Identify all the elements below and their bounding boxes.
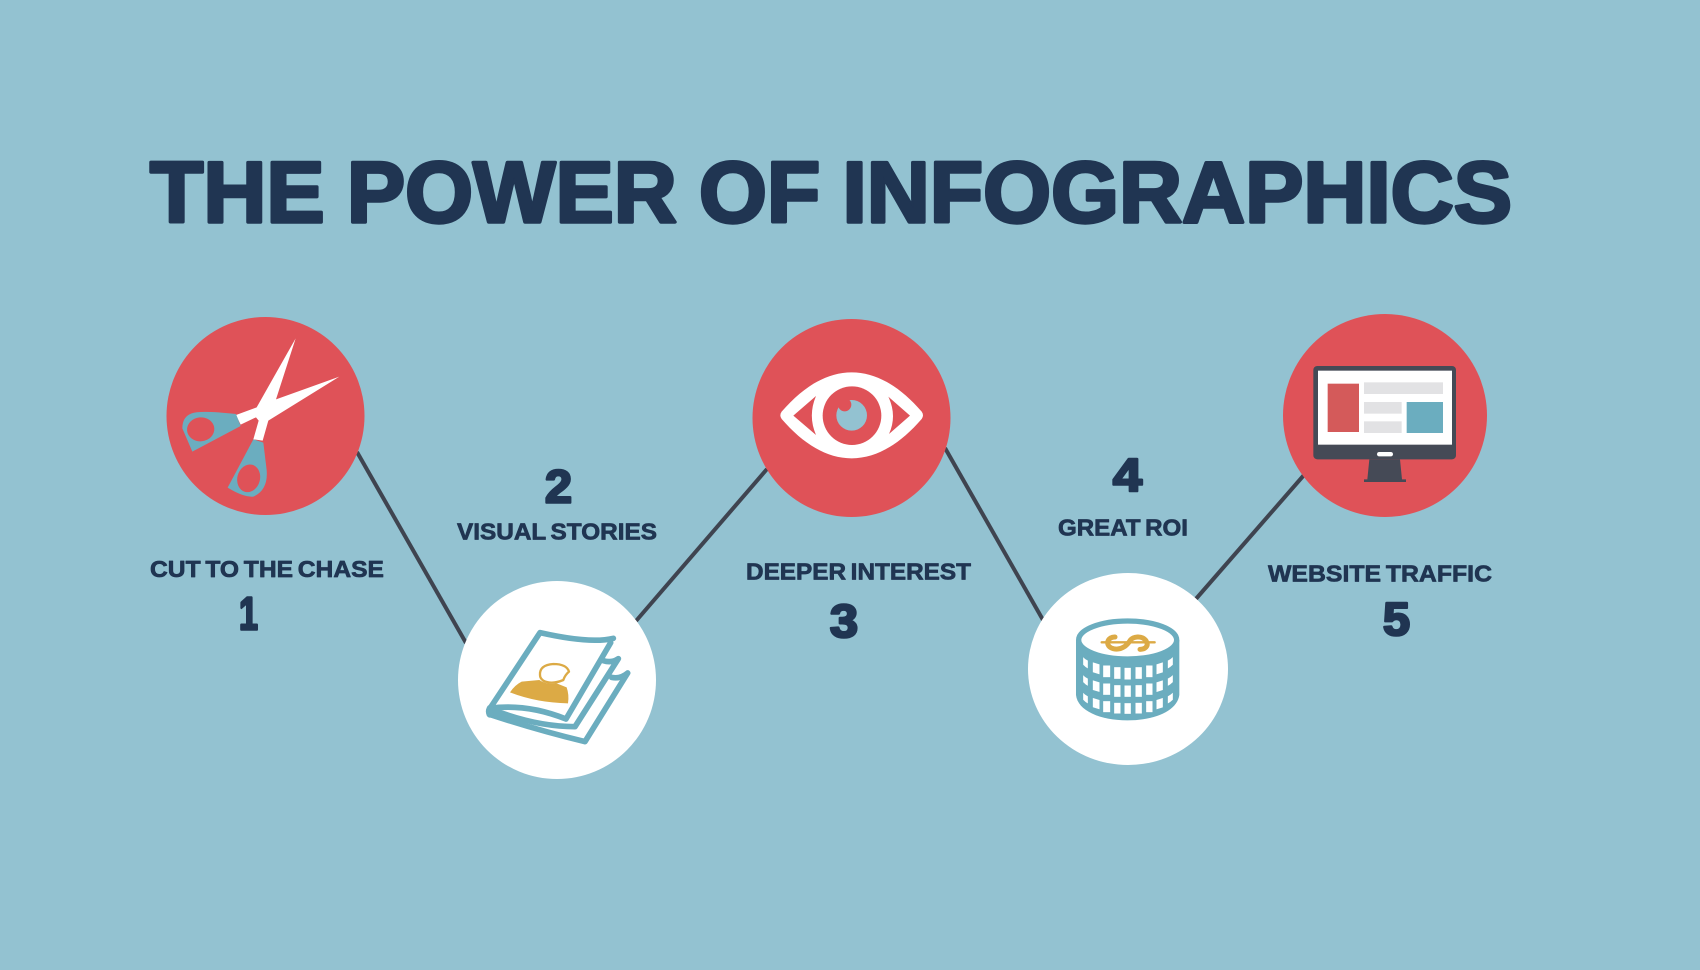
- number 2: 2: [545, 460, 572, 512]
- number 1: 1: [239, 588, 258, 640]
- title: THE POWER OF INFOGRAPHICS: [150, 145, 1512, 241]
- label: GREAT ROI: [1058, 514, 1188, 540]
- connector line: step 3 to step 4: [945, 448, 1043, 620]
- icon: scissors: [182, 338, 339, 497]
- step 3: deeper interest: [746, 319, 971, 647]
- step 5: website traffic: [1268, 314, 1492, 645]
- person portrait: [510, 664, 569, 703]
- connector line: step 1 to step 2: [357, 452, 466, 643]
- number 3: 3: [830, 595, 858, 647]
- red circle: [752, 319, 950, 517]
- label: CUT TO THE CHASE: [150, 556, 384, 582]
- white circle: [1028, 573, 1228, 765]
- connector line: step 4 to step 5: [1195, 475, 1304, 600]
- step 4: great roi: [1028, 449, 1228, 765]
- icon: coin stack: [1076, 621, 1179, 720]
- label: WEBSITE TRAFFIC: [1268, 560, 1492, 586]
- number 4: 4: [1113, 449, 1142, 501]
- label: VISUAL STORIES: [457, 518, 657, 544]
- label: DEEPER INTEREST: [746, 558, 971, 584]
- coin windows: [1083, 656, 1173, 714]
- dollar sign: [1102, 637, 1155, 649]
- icon: desktop monitor: [1313, 366, 1456, 482]
- step 2: visual stories: [457, 460, 657, 779]
- white circle: [458, 581, 656, 779]
- number 5: 5: [1383, 593, 1410, 645]
- icon: magazine: [489, 633, 628, 742]
- step 1: cut to the chase: [150, 317, 384, 640]
- icon: eye: [780, 372, 923, 458]
- connector line: step 2 to step 3: [636, 469, 767, 621]
- red circle: [1283, 314, 1487, 517]
- red circle: [166, 317, 364, 515]
